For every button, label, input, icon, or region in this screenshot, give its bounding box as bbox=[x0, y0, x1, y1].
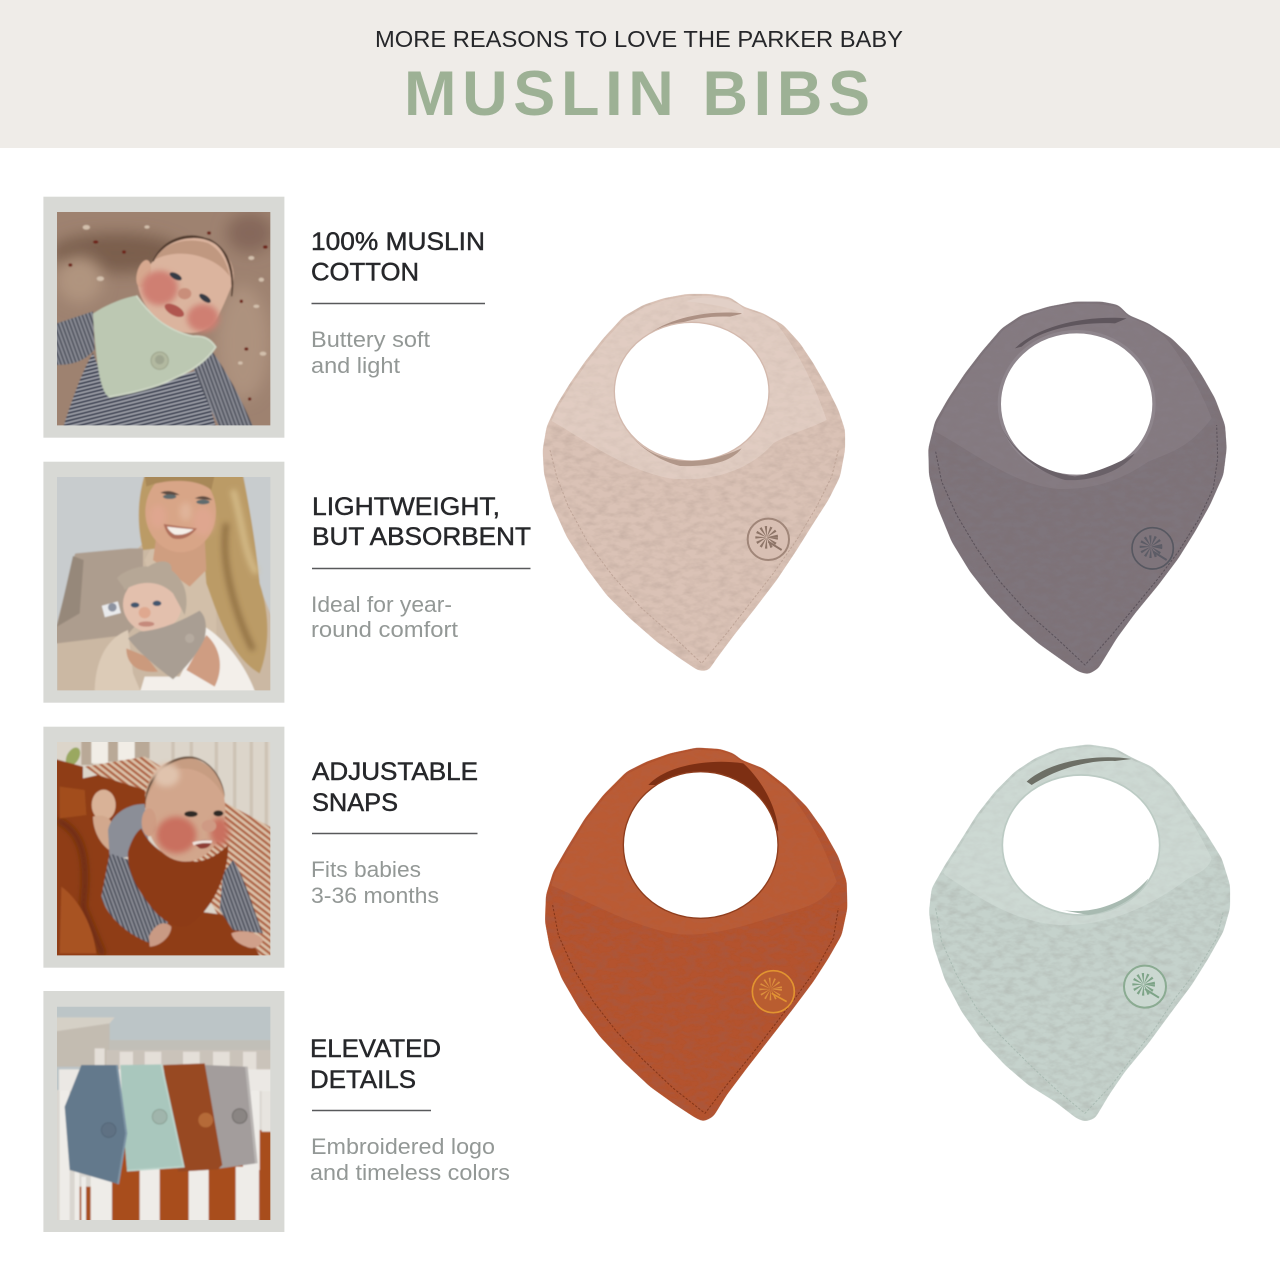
feature text: elevated details: Embroidered logo bbox=[311, 1134, 495, 1159]
photo frame: four bibs on crib rail bbox=[43, 991, 284, 1232]
photo frame: mother and baby bbox=[43, 462, 284, 703]
logo: rust bib bbox=[752, 971, 794, 1013]
bib: sage mint bbox=[922, 738, 1230, 1122]
feature text: lightweight but absorbent: Ideal for year- bbox=[311, 592, 452, 617]
bib: slate mauve bbox=[922, 295, 1227, 674]
photo frame: baby on rust blanket bbox=[43, 727, 284, 968]
feature text: 100% muslin cotton: COTTON bbox=[311, 258, 419, 286]
photo frame: baby with sage bib bbox=[43, 197, 284, 438]
feature text: adjustable snaps: Fits babies bbox=[311, 857, 421, 882]
feature text: lightweight but absorbent: BUT ABSORBENT bbox=[312, 523, 531, 551]
feature text: adjustable snaps: SNAPS bbox=[312, 789, 398, 817]
feature text: 100% muslin cotton: Buttery soft bbox=[311, 327, 430, 352]
feature text: adjustable snaps: 3-36 months bbox=[311, 883, 439, 908]
bib: terracotta rust bbox=[537, 742, 847, 1122]
feature text: elevated details: ELEVATED bbox=[310, 1035, 441, 1063]
feature text: 100% muslin cotton: 100% MUSLIN bbox=[311, 228, 485, 256]
feature text: elevated details: and timeless colors bbox=[310, 1160, 510, 1185]
header subtitle: MORE REASONS TO LOVE THE PARKER BABY bbox=[375, 26, 903, 52]
logo: blush bib bbox=[748, 519, 789, 560]
feature text: adjustable snaps bbox=[311, 758, 478, 908]
feature text: adjustable snaps: ADJUSTABLE bbox=[312, 758, 478, 786]
bib: blush pink bbox=[537, 287, 845, 671]
feature text: 100% muslin cotton: and light bbox=[311, 353, 400, 378]
logo: mauve bib bbox=[1132, 528, 1173, 569]
logo: sage bib bbox=[1124, 966, 1166, 1008]
feature text: elevated details bbox=[310, 1035, 510, 1185]
feature text: lightweight but absorbent: LIGHTWEIGHT, bbox=[312, 493, 500, 521]
feature text: lightweight but absorbent bbox=[311, 493, 531, 642]
feature text: lightweight but absorbent: round comfort bbox=[311, 617, 458, 642]
feature text: elevated details: DETAILS bbox=[310, 1066, 416, 1094]
main title: MUSLIN BIBS bbox=[404, 59, 870, 129]
feature text: 100% muslin cotton bbox=[311, 228, 485, 378]
header band bbox=[0, 0, 1280, 148]
